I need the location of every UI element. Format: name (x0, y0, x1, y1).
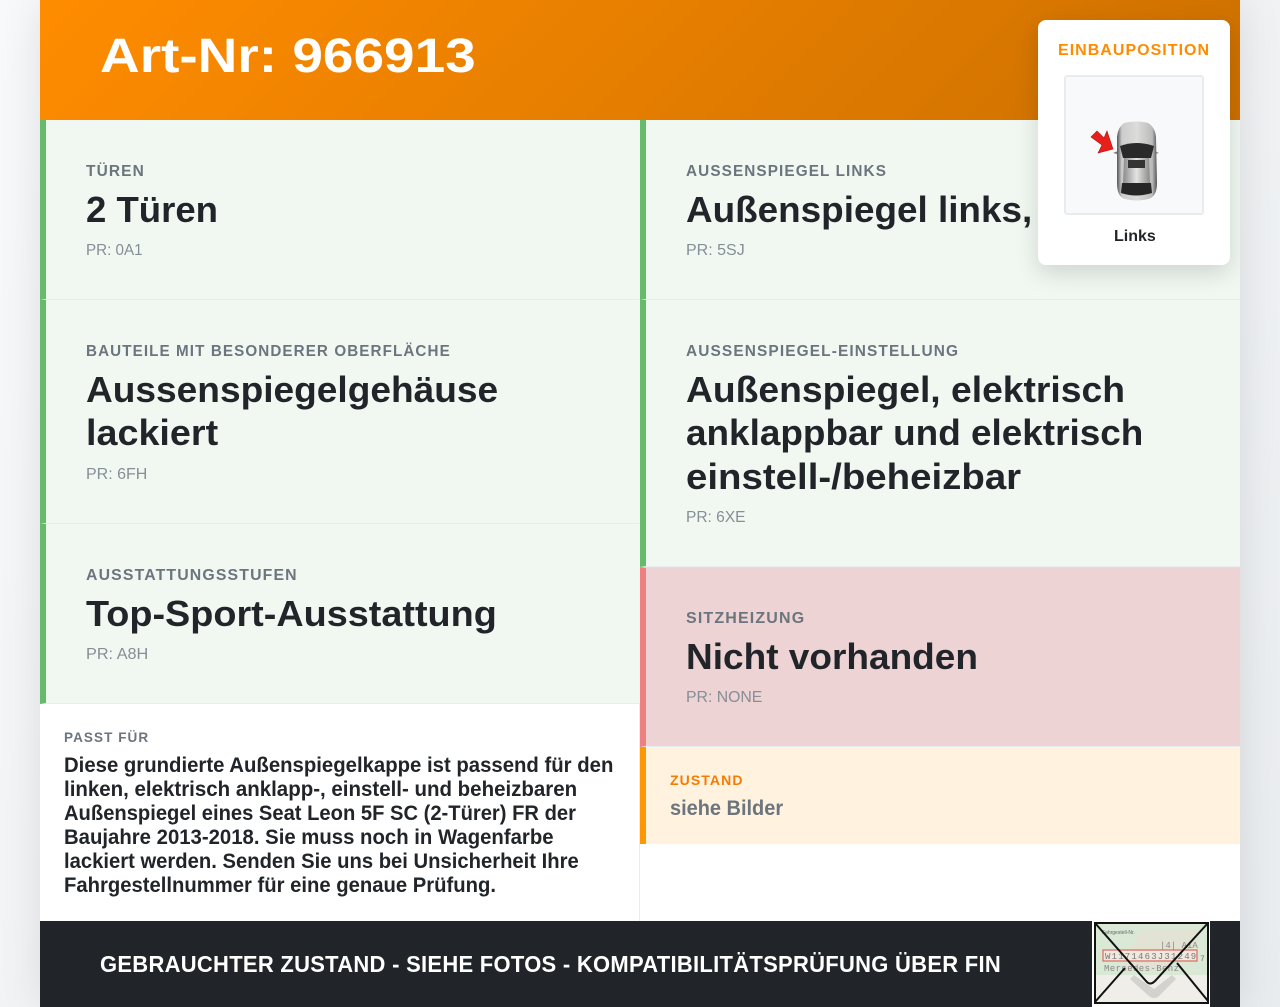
description: Außenspiegel eines Seat Leon 5F SC (2-Türer) FR der (64, 802, 576, 825)
icon: registration document in envelope: Fahrgestell-Nr. (1102, 930, 1135, 936)
value: Top-Sport-Ausstattung (86, 593, 497, 634)
value: Aussenspiegelgehäuse (86, 369, 498, 410)
description: Baujahre 2013-2018. Sie muss noch in Wagenfarbe (64, 826, 554, 849)
description: Fahrgestellnummer für eine genaue Prüfung. (64, 874, 496, 897)
footer text: GEBRAUCHTER ZUSTAND - SIEHE FOTOS - KOMPATIBILITÄTSPRÜFUNG ÜBER FIN (100, 951, 1001, 977)
description: linken, elektrisch anklapp-, einstell- und beheizbaren (64, 778, 577, 801)
description: Diese grundierte Außenspiegelkappe ist passend für den (64, 754, 613, 777)
PR code: PR: 6FH (86, 466, 147, 483)
PR code: PR: A8H (86, 646, 148, 663)
label: TÜREN (86, 163, 145, 180)
label: AUSSTATTUNGSSTUFEN (86, 567, 298, 584)
value: siehe Bilder (670, 797, 783, 820)
value: einstell-/beheizbar (686, 456, 1021, 497)
value: Außenspiegel, elektrisch (686, 369, 1125, 410)
icon: car seen from above with red arrow (1064, 75, 1204, 215)
icon: registration document in envelope (1092, 921, 1210, 1007)
panel: Bauteile mit besonderer Oberfläche (40, 300, 640, 524)
description: lackiert werden. Senden Sie uns bei Unsicherheit Ihre (64, 850, 579, 873)
header band (40, 0, 1240, 120)
position heading: EINBAUPOSITION (1058, 42, 1210, 58)
value: 2 Türen (86, 189, 218, 230)
value: Nicht vorhanden (686, 636, 978, 677)
PR code: PR: NONE (686, 689, 762, 706)
panel: Sitzheizung (640, 567, 1240, 747)
PR code: PR: 6XE (686, 509, 746, 526)
title: Art-Nr: 966913 (100, 30, 476, 83)
value: anklappbar und elektrisch (686, 412, 1143, 453)
PR code: PR: 5SJ (686, 242, 745, 259)
PR code: PR: 0A1 (86, 242, 143, 259)
position caption: Links (1114, 228, 1156, 245)
position card (1038, 20, 1230, 265)
description (64, 754, 613, 897)
label: AUSSENSPIEGEL-EINSTELLUNG (686, 343, 959, 360)
label: ZUSTAND (670, 772, 744, 788)
panel: Passt für (40, 704, 640, 921)
label: BAUTEILE MIT BESONDERER OBERFLÄCHE (86, 343, 451, 360)
panel: Zustand (640, 747, 1240, 844)
value: Außenspiegel links, (686, 189, 1032, 230)
icon: registration document in envelope: 7 (1200, 955, 1205, 964)
value (86, 369, 498, 453)
panel: Ausstattungsstufen (40, 524, 640, 704)
value: lackiert (86, 412, 218, 453)
icon: registration document in envelope: W1171463J31249 (1105, 952, 1197, 962)
icon: registration document in envelope: |4| AiA (1160, 941, 1198, 951)
value (686, 369, 1143, 497)
label: SITZHEIZUNG (686, 610, 805, 627)
panel: Türen (40, 120, 640, 300)
panel: Außenspiegel-Einstellung (640, 300, 1240, 567)
label: PASST FÜR (64, 729, 149, 745)
label: AUSSENSPIEGEL LINKS (686, 163, 887, 180)
icon: registration document in envelope: Mercedes-Benz (1104, 964, 1179, 974)
footer bar (40, 921, 1240, 1007)
panel: Außenspiegel links (640, 120, 1240, 300)
